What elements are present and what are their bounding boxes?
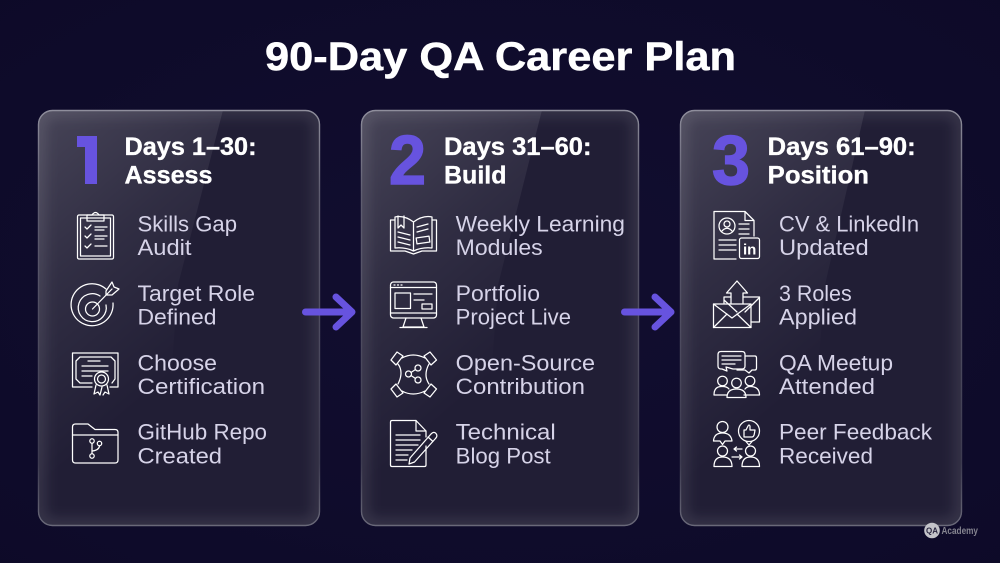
heading: Days 31–60:	[444, 133, 592, 161]
heading: Days 1–30:	[124, 133, 256, 161]
icon: open book	[390, 216, 436, 254]
text: github repo created: GitHub Repo	[138, 420, 267, 444]
text: 3 roles applied: 3 Roles	[779, 281, 852, 306]
icon: envelopes and arrow	[714, 281, 760, 328]
text: target role defined: Defined	[138, 304, 216, 329]
text: peer feedback received: Received	[779, 443, 873, 468]
text: 3 roles applied	[779, 281, 857, 329]
text: target role defined: Target Role	[138, 281, 255, 306]
number 3: 3	[712, 121, 750, 199]
text: weekly learning modules: Weekly Learning	[456, 211, 625, 236]
text: open-source contribution: Contribution	[456, 374, 585, 399]
text: portfolio project live	[456, 281, 571, 329]
heading	[768, 133, 916, 190]
text: qa meetup attended: Attended	[779, 374, 875, 399]
text: skills gap audit: Audit	[138, 235, 192, 260]
icon: certificate	[72, 353, 118, 395]
icon: open-source hands	[391, 352, 436, 397]
text: weekly learning modules: Modules	[456, 235, 543, 260]
number 2: 2	[389, 121, 426, 199]
text: choose certification: Choose	[138, 350, 217, 375]
icon: blog document and pen	[390, 420, 437, 466]
text: weekly learning modules	[456, 211, 625, 260]
icon: target	[71, 282, 119, 326]
heading	[124, 133, 256, 190]
number 1	[77, 136, 97, 184]
text: 3 roles applied: Applied	[779, 304, 857, 329]
logo: qa academy: Academy	[942, 526, 978, 537]
text: cv and linkedin updated: Updated	[779, 235, 869, 260]
text: skills gap audit: Skills Gap	[138, 211, 237, 236]
text: skills gap audit	[138, 211, 237, 260]
text: portfolio project live: Project Live	[456, 304, 571, 329]
icon: peer feedback	[714, 420, 760, 466]
icon: meetup people and speech	[714, 352, 760, 398]
icon: github repo folder	[72, 424, 118, 463]
heading: Position	[768, 162, 869, 190]
title: 90-Day QA Career Plan	[265, 35, 736, 79]
heading: Build	[444, 162, 506, 190]
icon: cv and linkedin	[714, 212, 760, 259]
logo: qa academy	[924, 523, 978, 538]
text: open-source contribution: Open-Source	[456, 350, 595, 375]
text: qa meetup attended	[779, 350, 893, 399]
icon: clipboard checklist	[78, 212, 114, 259]
arrow: step 2 to step 3	[624, 297, 671, 327]
text: choose certification	[138, 350, 265, 399]
text: target role defined	[138, 281, 255, 329]
text: qa meetup attended: QA Meetup	[779, 350, 893, 375]
icon: cv and linkedin: in	[743, 242, 756, 258]
arrow: step 1 to step 2	[306, 297, 352, 327]
text: peer feedback received: Peer Feedback	[779, 420, 933, 444]
text: peer feedback received	[779, 420, 933, 468]
text: github repo created	[138, 420, 267, 468]
panel: days 31-60 build	[361, 110, 639, 526]
heading	[444, 133, 592, 190]
text: choose certification: Certification	[138, 374, 265, 399]
text: technical blog post: Technical	[456, 420, 556, 444]
heading: Assess	[124, 162, 212, 190]
text: open-source contribution	[456, 350, 595, 399]
panel: days 61-90 position	[680, 110, 962, 526]
heading: Days 61–90:	[768, 133, 916, 161]
icon: portfolio monitor	[390, 282, 436, 328]
logo: qa academy: QA	[926, 526, 938, 536]
text: github repo created: Created	[138, 443, 222, 468]
panel: days 1-30 assess	[38, 110, 320, 526]
text: technical blog post: Blog Post	[456, 443, 551, 468]
text: technical blog post	[456, 420, 556, 468]
text: cv and linkedin updated: CV & LinkedIn	[779, 211, 919, 236]
text: cv and linkedin updated	[779, 211, 919, 260]
text: portfolio project live: Portfolio	[456, 281, 540, 306]
